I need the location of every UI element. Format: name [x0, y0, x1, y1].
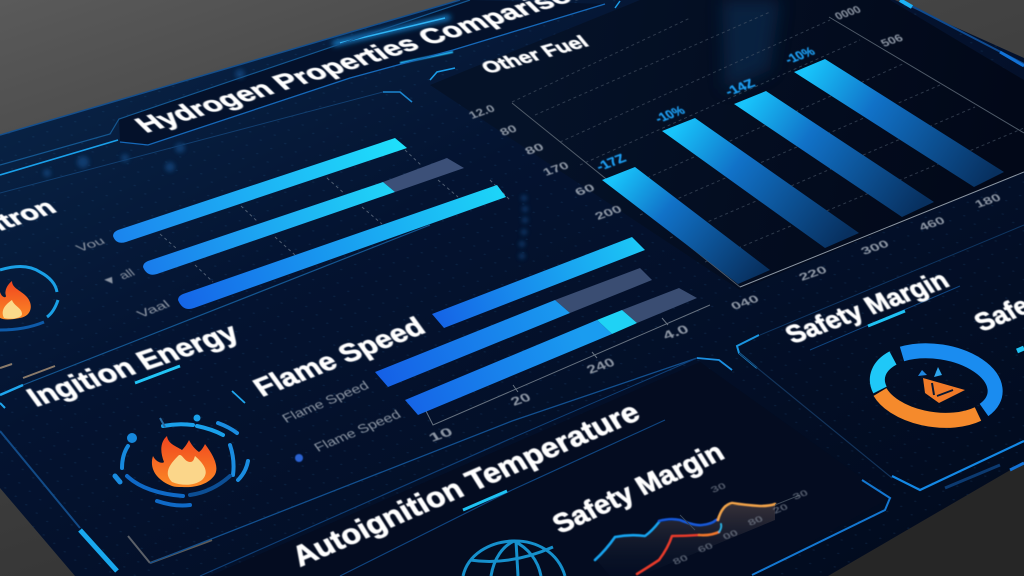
icon: ring gauge: [877, 351, 995, 420]
line chart labels: 60: [696, 541, 716, 555]
flame bar 2 track: [555, 268, 652, 313]
chart panel background: [430, 0, 1024, 290]
horizontal bar chart: hydrogen: [73, 138, 510, 320]
flame speed labels: Flame Speed: [279, 378, 372, 425]
x axis labels: 040: [728, 293, 762, 312]
line chart labels: [671, 481, 811, 567]
column value labels: -10%: [652, 104, 688, 126]
flame speed axis labels: 10: [426, 425, 456, 444]
bar 2: [143, 182, 395, 275]
flame bar 3 track: [622, 288, 697, 323]
bar 3: [178, 185, 506, 309]
flame bar 3 highlight: [597, 310, 637, 334]
flame bar 1: [432, 237, 645, 328]
warning icon: [918, 367, 965, 403]
flame speed labels: Flame Speed: [311, 407, 404, 454]
top edge glow: [0, 0, 460, 135]
chart reflection: [722, 0, 780, 90]
y axis labels: 80: [497, 123, 520, 138]
x axis labels: 300: [858, 238, 892, 257]
y axis labels: 80: [522, 141, 547, 157]
title frame: [0, 0, 620, 193]
lower panel background: [210, 362, 890, 576]
x axis labels: 180: [972, 192, 1004, 210]
bar labels: [73, 234, 173, 320]
line chart labels: 80: [746, 514, 766, 528]
line chart labels: 80: [671, 553, 691, 567]
x axis labels: 506: [878, 32, 906, 49]
column 1: [602, 167, 770, 284]
bar 1: [113, 138, 407, 243]
y axis labels: 12.0: [466, 103, 498, 121]
icon: small flame gauge: [0, 266, 58, 330]
y axis labels: 60: [572, 182, 598, 198]
flame speed axis labels: 240: [584, 356, 618, 376]
line chart: safety margin: [595, 481, 811, 576]
x axis labels: 0000: [832, 4, 864, 22]
right edge accent: [900, 0, 1024, 66]
line chart labels: 20: [771, 502, 791, 516]
y axis labels: 170: [540, 160, 572, 178]
x axis labels: 220: [796, 264, 830, 283]
x axis labels: [728, 4, 1004, 312]
line chart labels: 30: [791, 488, 811, 502]
title band: [119, 0, 605, 145]
line chart frame and gridlines: [512, 12, 1024, 287]
bar labels: ▼ all: [99, 266, 138, 288]
column value labels: -17Z: [593, 152, 629, 174]
y axis labels: 200: [592, 203, 625, 222]
flame speed axis labels: 20: [508, 390, 534, 408]
column 4: [794, 59, 1004, 187]
bar labels: Vou: [73, 234, 108, 254]
line chart labels: 00: [721, 528, 741, 542]
column value labels: [593, 45, 818, 174]
panel: ignition energy frame: [0, 225, 732, 571]
flame bar 2: [375, 300, 570, 387]
column value labels: -10%: [782, 45, 818, 67]
flame speed axis: [423, 305, 710, 444]
column 2: [662, 118, 859, 248]
panel: autoignition temperature: [200, 358, 890, 576]
bar chart: flame speed: [375, 237, 697, 415]
decorative glow dots: [43, 69, 528, 259]
heading: autoignition temperature: Autoignition Temperature: [286, 395, 645, 572]
heading: safety margin lower: Safety Margin: [547, 437, 729, 539]
heading: safety margin right: Safety Margin: [780, 266, 955, 349]
line chart labels: 30: [709, 481, 729, 495]
flame bar 3: [405, 320, 612, 415]
bar 2 track: [383, 158, 464, 192]
heading: other fuel: Other Fuel: [476, 32, 593, 77]
accent tick: [1017, 348, 1024, 351]
flame speed labels: [279, 378, 404, 454]
heading: ignition energy: Ingition Energy: [21, 317, 246, 412]
heading: flame speed: Flame Speed: [248, 312, 431, 402]
flame speed axis labels: [426, 322, 692, 444]
flame speed axis labels: 4.0: [660, 322, 692, 342]
icon: flame gauge: [115, 414, 248, 506]
y axis labels: [466, 103, 625, 222]
column value labels: -14Z: [722, 77, 758, 99]
flame: [152, 436, 216, 487]
x axis labels: 460: [916, 215, 948, 233]
dark table corner: [800, 440, 1024, 576]
legend dot: [295, 454, 303, 462]
vertical bar chart: [466, 4, 1004, 312]
bar labels: Vaal: [134, 298, 173, 320]
panel: safety margin: [737, 225, 1024, 490]
column 3: [734, 91, 934, 217]
icon: globe: [463, 541, 565, 576]
